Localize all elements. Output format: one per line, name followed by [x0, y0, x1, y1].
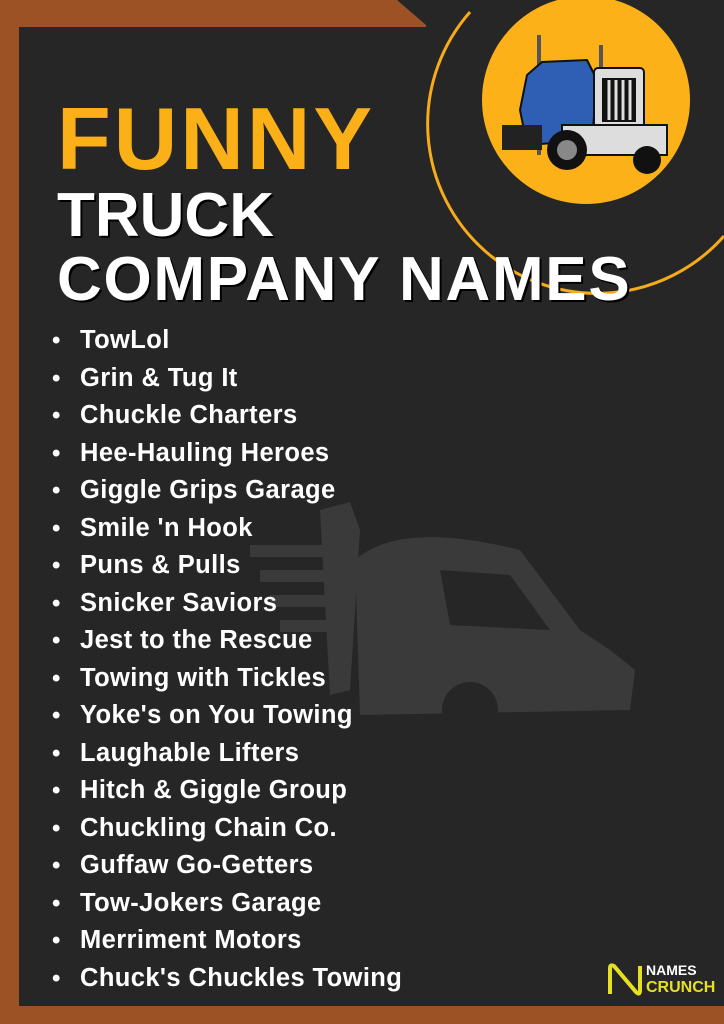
list of names: Giggle Grips Garage — [80, 476, 336, 504]
list of names: Guffaw Go-Getters — [80, 851, 314, 879]
icon: truck in yellow circle — [482, 0, 690, 204]
list of names: Jest to the Rescue — [80, 626, 313, 654]
list of names — [52, 326, 402, 992]
logo: NamesCrunch: NAMES — [646, 962, 697, 978]
list of names: TowLol — [80, 326, 170, 354]
list of names: Hee-Hauling Heroes — [80, 438, 330, 466]
list of names: Yoke's on You Towing — [80, 701, 353, 729]
list of names: Chuckling Chain Co. — [80, 814, 337, 842]
list of names: Grin & Tug It — [80, 364, 238, 392]
list of names: Chuck's Chuckles Towing — [80, 964, 402, 992]
list of names: Smile 'n Hook — [80, 514, 253, 542]
list of names: Chuckle Charters — [80, 401, 298, 429]
list of names: Tow-Jokers Garage — [80, 888, 322, 916]
list of names: Snicker Saviors — [80, 588, 277, 616]
orange ring arc — [426, 11, 724, 295]
logo: NamesCrunch — [608, 962, 715, 996]
background truck silhouette — [250, 502, 635, 715]
logo: NamesCrunch: CRUNCH — [646, 979, 715, 996]
title: COMPANY NAMES: COMPANY NAMES — [57, 245, 631, 314]
list of names: Towing with Tickles — [80, 664, 326, 692]
list of names: Puns & Pulls — [80, 551, 241, 579]
list of names: Hitch & Giggle Group — [80, 776, 347, 804]
list of names: Laughable Lifters — [80, 738, 299, 766]
title: FUNNY: FUNNY — [57, 89, 375, 188]
list of names: Merriment Motors — [80, 926, 302, 954]
title: TRUCK: TRUCK — [57, 181, 274, 250]
